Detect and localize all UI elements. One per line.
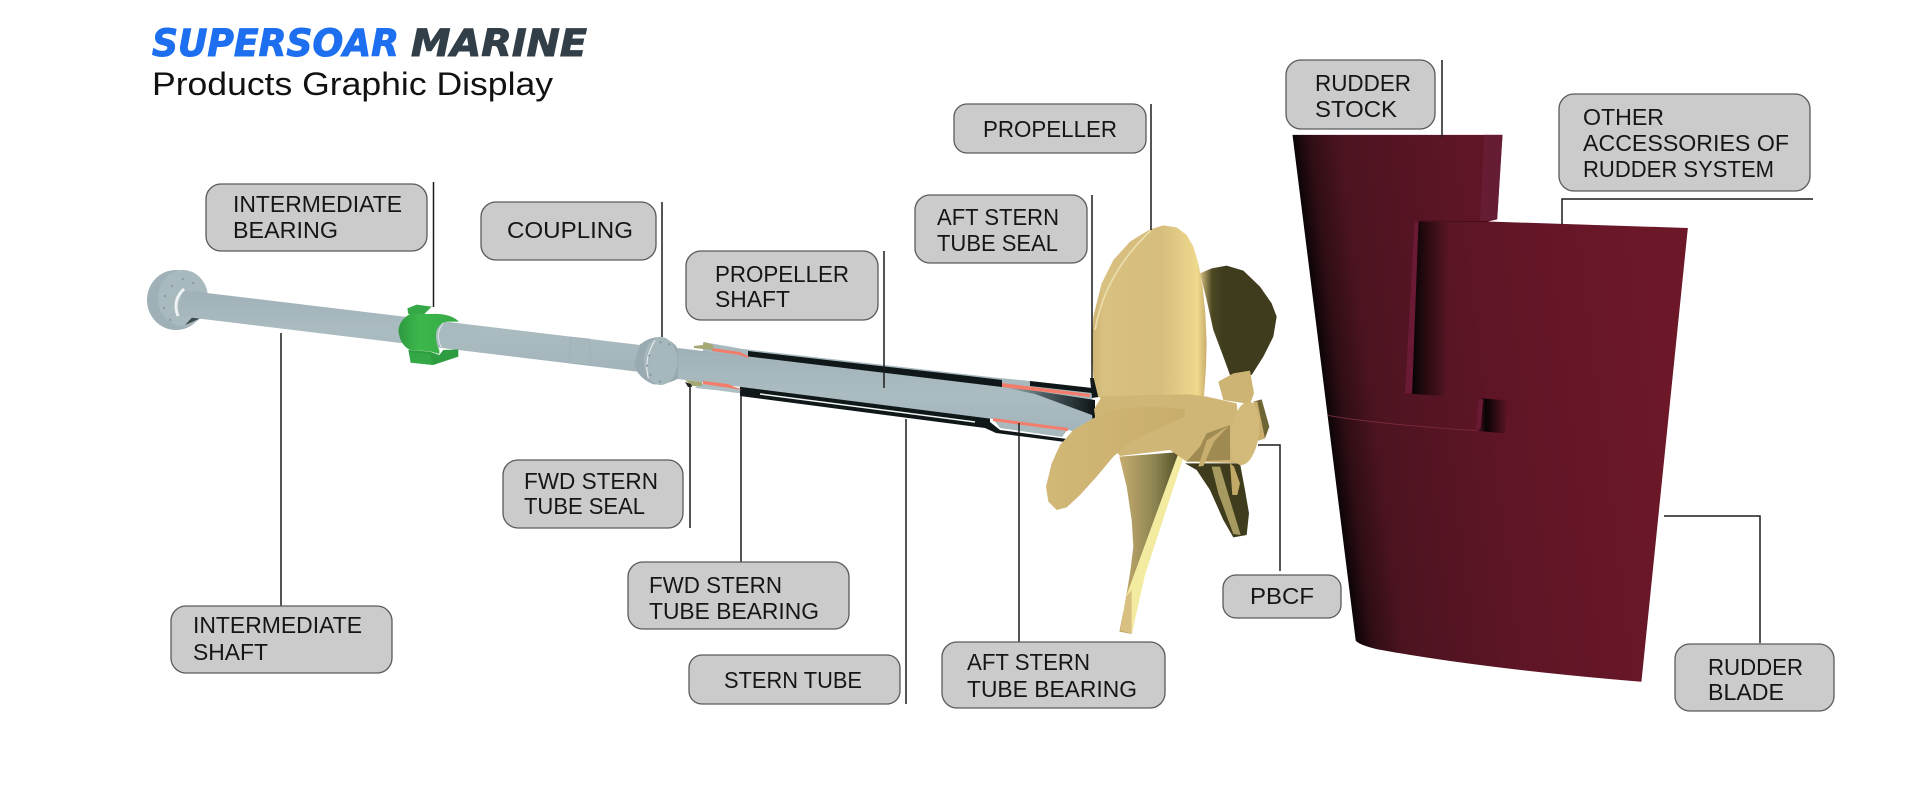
logo: Supersoar Marine: SUPERSOAR: [152, 22, 399, 65]
label: rudder stock: STOCK: [1315, 96, 1398, 122]
label: fwd stern tube seal: TUBE SEAL: [524, 493, 645, 519]
label: aft stern tube seal: [915, 195, 1087, 263]
label: propeller shaft: [686, 251, 878, 320]
intermediate bearing: [398, 305, 480, 365]
label: aft stern tube bearing: [942, 642, 1165, 708]
label: PBCF: PBCF: [1250, 583, 1314, 609]
stern tube bearings: [703, 348, 1090, 431]
label: aft stern tube bearing: AFT STERN: [967, 649, 1090, 675]
label: rudder stock: [1286, 60, 1435, 129]
label: rudder blade: RUDDER: [1708, 654, 1803, 680]
label: rudder stock: RUDDER: [1315, 70, 1411, 96]
label: propeller shaft: SHAFT: [715, 286, 790, 312]
label: aft stern tube seal: AFT STERN: [937, 204, 1059, 230]
label: propeller: PROPELLER: [983, 116, 1117, 142]
label: other accessories of rudder system: OTHER: [1583, 104, 1664, 130]
label: stern tube: STERN TUBE: [724, 667, 862, 693]
label: intermediate shaft: [171, 606, 392, 673]
label: aft stern tube bearing: TUBE BEARING: [967, 676, 1137, 702]
leader lines: [281, 60, 1813, 704]
label: intermediate bearing: INTERMEDIATE: [233, 191, 402, 217]
coupling: [634, 337, 679, 385]
subtitle: Products Graphic Display: [152, 66, 553, 102]
label: fwd stern tube seal: [503, 460, 683, 528]
label: propeller: [954, 104, 1146, 153]
logo: Supersoar Marine: MARINE: [411, 22, 587, 65]
label: fwd stern tube bearing: FWD STERN: [649, 572, 782, 598]
rudder: [1292, 135, 1688, 682]
label: PBCF: [1223, 575, 1341, 618]
stern tube seals: [685, 342, 713, 386]
label: fwd stern tube seal: FWD STERN: [524, 468, 658, 494]
label: propeller shaft: PROPELLER: [715, 261, 849, 287]
logo: Supersoar Marine: [152, 22, 587, 65]
intermediate shaft: [147, 270, 640, 372]
label: coupling: [481, 202, 656, 260]
label: fwd stern tube bearing: [628, 562, 849, 629]
label: rudder blade: BLADE: [1708, 679, 1784, 705]
label: rudder blade: [1675, 644, 1834, 711]
label: other accessories of rudder system: ACCESSORIES OF: [1583, 130, 1789, 156]
rudder stock and blade body: [1292, 135, 1688, 682]
label: intermediate bearing: [206, 184, 427, 251]
propeller: [1046, 225, 1277, 634]
label: coupling: COUPLING: [507, 217, 633, 243]
label: intermediate shaft: SHAFT: [193, 639, 268, 665]
label: intermediate bearing: BEARING: [233, 217, 338, 243]
label: intermediate shaft: INTERMEDIATE: [193, 612, 362, 638]
stern tube and propeller shaft: [678, 342, 1105, 442]
label: fwd stern tube bearing: TUBE BEARING: [649, 598, 819, 624]
label: stern tube: [689, 655, 900, 704]
label: aft stern tube seal: TUBE SEAL: [937, 230, 1058, 256]
label: other accessories of rudder system: RUDDER SYSTEM: [1583, 156, 1774, 182]
label: other accessories of rudder system: [1559, 94, 1810, 191]
